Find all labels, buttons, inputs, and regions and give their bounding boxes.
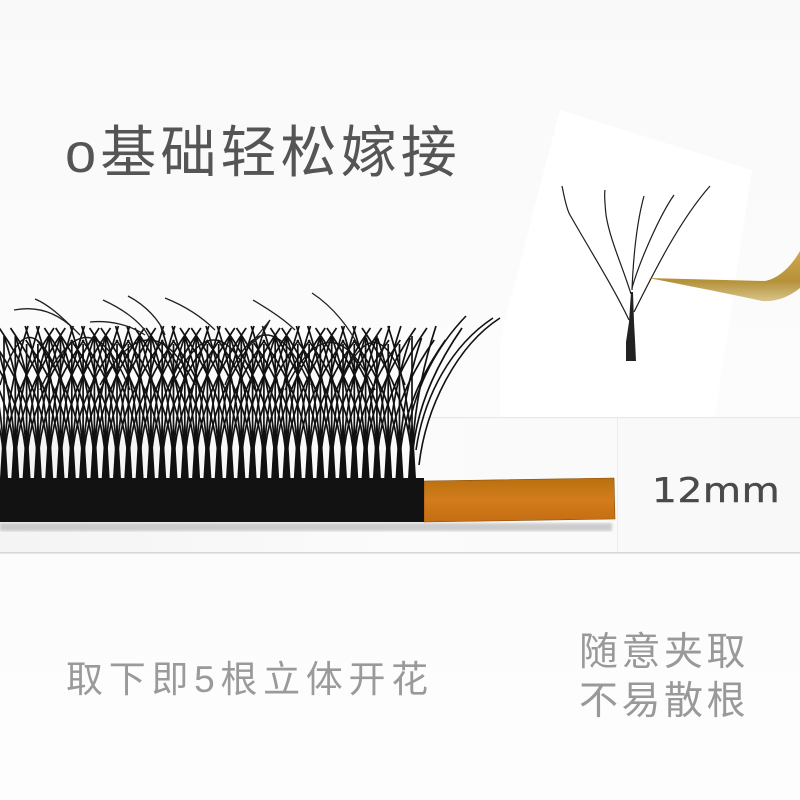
caption: right xyxy=(579,631,749,723)
caption: right: 不易散根 xyxy=(579,680,749,723)
measuring card xyxy=(0,417,800,554)
top wisps xyxy=(14,293,358,345)
lash fans xyxy=(0,326,462,482)
amber adhesive strip xyxy=(424,478,615,522)
caption: left: 取下即5根立体开花 xyxy=(66,659,434,700)
top arches xyxy=(0,335,405,390)
single 5-hair lash fan xyxy=(562,186,710,361)
strip shadow xyxy=(0,523,612,531)
lash strip xyxy=(0,293,500,522)
caption: right: 随意夹取 xyxy=(579,631,749,674)
rotated white backing card xyxy=(500,110,752,417)
length label: 12mm xyxy=(652,471,780,511)
right edge hairs xyxy=(408,316,500,465)
gold tweezers xyxy=(648,251,800,301)
title: o基础轻松嫁接 xyxy=(65,121,461,184)
